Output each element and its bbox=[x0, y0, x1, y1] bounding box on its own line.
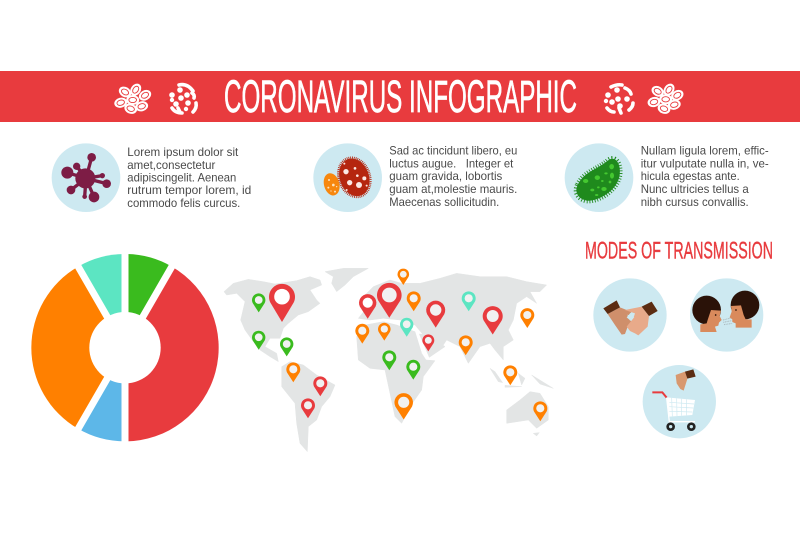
segment: green bbox=[125, 254, 172, 348]
icon: blood cells left bbox=[113, 82, 153, 116]
pin: green canada bbox=[252, 293, 265, 312]
text block: Lorem ipsum dolor sit bbox=[127, 145, 239, 159]
pin: orange morocco bbox=[355, 324, 369, 344]
icon: purple virus bbox=[52, 143, 120, 212]
segment: blue bbox=[78, 348, 125, 441]
panel: modes of transmission bbox=[585, 238, 773, 438]
pin: green east africa bbox=[406, 360, 420, 380]
text block: Nullam ligula lorem, effic- bbox=[641, 144, 769, 158]
pin: red brazil bbox=[313, 376, 327, 396]
header banner bbox=[0, 71, 800, 122]
text block: hicula egestas ante. bbox=[641, 169, 740, 183]
pin: red west europe bbox=[359, 294, 376, 319]
icon: blood cells right bbox=[646, 82, 685, 116]
pin: orange india bbox=[459, 335, 473, 355]
pin: red russia bbox=[426, 301, 445, 328]
world map bbox=[224, 268, 553, 452]
pin: orange australia bbox=[533, 401, 547, 421]
text block: Sad ac tincidunt libero, eu bbox=[389, 144, 517, 158]
pin: red large north america bbox=[269, 284, 295, 322]
pin: orange iceland bbox=[398, 269, 409, 285]
text block: amet,consectetur bbox=[127, 158, 215, 172]
text block bbox=[127, 145, 251, 210]
pin: orange algeria bbox=[378, 323, 391, 341]
pin: orange colombia bbox=[286, 362, 300, 382]
pin: teal siberia bbox=[462, 291, 476, 311]
text block: adipiscingelit. Aenean bbox=[127, 170, 236, 184]
pin: teal turkey bbox=[400, 318, 413, 337]
pin: red china bbox=[483, 306, 503, 334]
text block bbox=[641, 144, 769, 209]
text block: rutrum tempor lorem, id bbox=[127, 183, 251, 197]
text block: itur vulputate nulla in, ve- bbox=[641, 156, 769, 170]
pin: orange south africa bbox=[394, 393, 413, 420]
text block: nibh cursus convallis. bbox=[641, 195, 749, 209]
text block: Nunc ultricies tellus a bbox=[641, 182, 749, 196]
text block: guam gravida, lobortis bbox=[389, 169, 502, 183]
icon: bacteria cluster right bbox=[604, 85, 633, 113]
segment: orange bbox=[31, 267, 125, 429]
icon: bacteria cluster left bbox=[169, 85, 196, 113]
pin: red bolivia bbox=[301, 398, 315, 418]
segment: teal bbox=[78, 254, 125, 348]
icon: red and orange bacteria bbox=[313, 143, 382, 212]
segment: red bbox=[125, 267, 219, 441]
text block: Maecenas sollicitudin. bbox=[389, 195, 499, 209]
icon: handshake bbox=[593, 278, 667, 352]
map landmasses bbox=[224, 268, 553, 452]
text block: commodo felis curcus. bbox=[127, 196, 240, 210]
panel: red bacteria info bbox=[313, 143, 517, 212]
icon: shopping cart with hand bbox=[643, 365, 716, 438]
panel: green bacteria info bbox=[565, 143, 769, 212]
pin: red large europe bbox=[377, 283, 402, 318]
pin: orange east europe bbox=[407, 291, 421, 311]
donut chart bbox=[31, 250, 219, 445]
pin: orange indonesia bbox=[503, 365, 517, 385]
text block bbox=[389, 144, 517, 209]
pin: green west africa bbox=[382, 350, 396, 370]
text block: luctus augue. Integer et bbox=[389, 156, 514, 170]
pin: red arabia bbox=[422, 334, 434, 351]
icon: two people talking bbox=[690, 278, 763, 352]
pin: orange japan bbox=[520, 308, 534, 328]
panel: virus info bbox=[52, 143, 251, 212]
pin: green mexico bbox=[252, 331, 265, 350]
text block: guam at,molestie mauris. bbox=[389, 182, 517, 196]
icon: green bacterium bbox=[565, 143, 633, 212]
pin: green caribbean bbox=[280, 337, 293, 356]
